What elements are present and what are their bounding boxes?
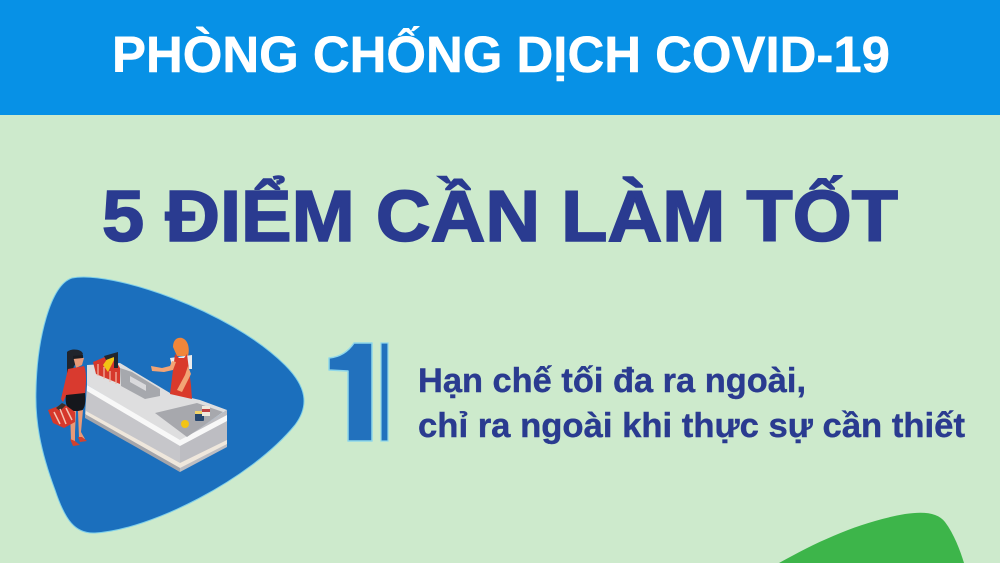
- text block: advice: Hạn chế tối đa ra ngoài,: [418, 362, 806, 400]
- icon: shopper: [48, 350, 87, 446]
- icon: checkout counter: [85, 352, 227, 472]
- icon: shopping basket: [48, 403, 75, 428]
- header banner: [0, 0, 1000, 115]
- panel: blue blob with checkout illustration: [36, 277, 304, 533]
- text block: advice: [418, 362, 965, 445]
- icon: basket on counter: [93, 352, 120, 384]
- heading: 5 points: 5 ĐIỂM CẦN LÀM TỐT: [102, 175, 898, 257]
- icon: cans and item: [181, 406, 210, 428]
- title: PHÒNG CHỐNG DỊCH COVID-19: [112, 25, 890, 83]
- panel: green blob (next item): [779, 513, 964, 563]
- icon: cashier: [151, 338, 192, 399]
- number 1 with bar: [329, 343, 388, 441]
- text block: advice: chỉ ra ngoài khi thực sự cần thiết: [418, 407, 965, 445]
